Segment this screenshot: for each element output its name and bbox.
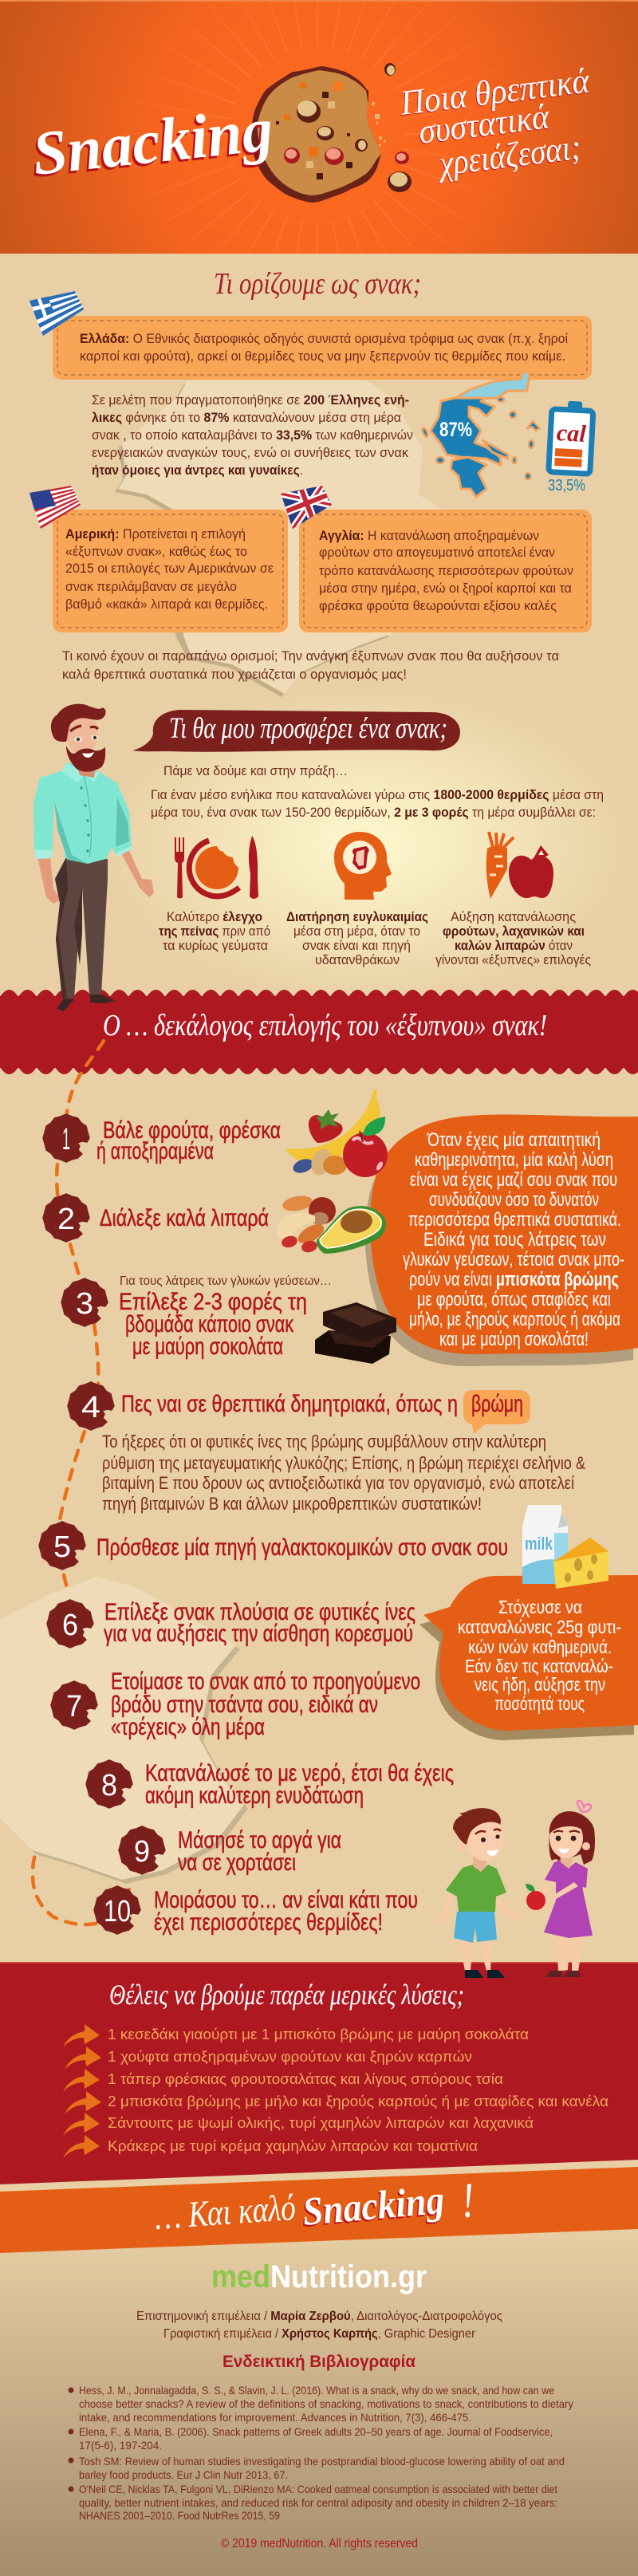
- step 5: Πρόσθεσε μία πηγή γαλακτοκομικών στο σνακ σου: [96, 1534, 508, 1561]
- badge 1: [43, 1114, 89, 1162]
- solution 6: [63, 2135, 478, 2158]
- icon: calorie battery: [548, 400, 593, 494]
- step 3: Για τους λάτρεις των γλυκών γεύσεων…: [120, 1274, 332, 1288]
- text: America definition: «έξυπνων σνακ», καθώς έως το: [65, 544, 247, 559]
- references list: barley food products. Eur J Clin Nutr 2013, 67.: [79, 2468, 288, 2481]
- text: benefit hunger control: τα κυρίως γεύματα: [163, 938, 268, 953]
- orange callout: demanding daily life: [365, 1114, 638, 1366]
- credits: Επιστημονική επιμέλεια / Μαρία Ζερβού, Διαιτολόγος-Διατροφολόγος: [136, 2310, 502, 2323]
- orange closing band: Snacking: [301, 2177, 446, 2234]
- text: benefit hunger control: της πείνας πριν από: [159, 924, 270, 939]
- references list: choose better snacks? A review of the definitions of snacking, motivations to snack, contributions to dietary: [79, 2397, 573, 2410]
- orange closing band: … Και καλό: [153, 2187, 297, 2237]
- badge 9: 9: [134, 1835, 150, 1869]
- step 1: Βάλε φρούτα, φρέσκα: [103, 1117, 281, 1144]
- text: Greek study: Σε μελέτη που πραγματοποιήθηκε σε 200 Έλληνες ενή-: [92, 392, 409, 408]
- text: America definition: βαθμό «κακά» λιπαρά και θερμίδες.: [65, 597, 268, 612]
- text: benefit hunger control: Καλύτερο έλεγχο: [167, 909, 262, 924]
- text: common ground: καλά θρεπτικά συστατικά που χρειάζεται ο οργανισμός μας!: [62, 667, 407, 682]
- dashed route line: [33, 1041, 134, 1924]
- references list: intake, and recommendations for improvement. Advances in Nutrition, 7(3), 466-475.: [79, 2411, 471, 2424]
- icon: nuts and avocado: [277, 1194, 386, 1254]
- subtitle: Ποια θρεπτικά: [397, 61, 592, 123]
- text: America definition: σνακ περιλάμβαναν σε μεγάλο: [65, 579, 237, 594]
- badge 5: 5: [53, 1530, 71, 1564]
- solution 3: 1 τάπερ φρέσκιας φρουτοσαλάτας και λίγους σπόρους τσία: [108, 2071, 503, 2087]
- text: benefit blood sugar: Διατήρηση ευγλυκαιμίας: [286, 909, 428, 924]
- text: Greece definition: Ελλάδα: Ο Εθνικός διατροφικός οδηγός συνιστά ορισμένα τρόφιμα ως σνακ (π.χ. ξηροί: [80, 331, 568, 346]
- title: Snacking: Snacking: [30, 94, 276, 188]
- oat bubble: βρώμη: [471, 1391, 523, 1417]
- step 10: έχει περισσότερες θερμίδες!: [154, 1909, 383, 1936]
- text: oat facts: Το ήξερες ότι οι φυτικές ίνες της βρώμης συμβάλλουν στην καλύτερη: [102, 1432, 546, 1451]
- badge 7: [51, 1681, 97, 1729]
- orange callout: demanding daily life: και με μαύρη σοκολάτα!: [439, 1329, 589, 1350]
- references list: Hess, J. M., Jonnalagadda, S. S., & Slavin, J. L. (2016). What is a snack, why do we snack, and how can we: [79, 2384, 554, 2397]
- boy character: [439, 1808, 522, 1978]
- credits: Γραφιστική επιμέλεια / Χρήστος Καρπής, Graphic Designer: [163, 2327, 476, 2341]
- badge 3: [61, 1278, 108, 1326]
- icon: head with toast: [334, 832, 392, 900]
- text: intro to benefits: μέρα του, ένα σνακ των 150-200 θερμίδων, 2 με 3 φορές τη μέρα συμβάλλει σε:: [151, 805, 596, 820]
- icon: calorie battery: 33,5%: [548, 477, 585, 494]
- banner: decalogue: [0, 987, 638, 1077]
- step 1: ή αποξηραμένα: [96, 1138, 214, 1164]
- panel: solutions: [0, 1962, 638, 2193]
- step 6: [47, 1599, 415, 1648]
- text: benefit hunger control: [159, 909, 270, 953]
- orange callout: fibre target: Στόχευσε να: [498, 1597, 582, 1617]
- orange callout: fibre target: ποσότητά τους: [494, 1693, 585, 1714]
- badge 10: 10: [104, 1895, 131, 1928]
- text: Greece definition: καρποί και φρούτα), αρκεί οι θερμίδες τους να μην ξεπερνούν τις θερμίδες που καίμε.: [80, 349, 565, 364]
- icon: bitten cookie: [250, 63, 412, 203]
- text: England definition: [319, 528, 573, 613]
- badge 3: 3: [76, 1287, 93, 1321]
- icon: Greek flag: [30, 291, 84, 336]
- panel: England: [299, 510, 592, 632]
- badge 4: 4: [81, 1391, 100, 1424]
- icon: US flag: [30, 486, 81, 529]
- references list: Tosh SM: Review of human studies investigating the postprandial blood-glucose lowering ability of oat and: [79, 2455, 565, 2468]
- icon: carrot and apple: [486, 832, 553, 899]
- text: common ground: Τι κοινό έχουν οι παραπάνω ορισμοί; Την ανάγκη έξυπνων σνακ που θα αυξήσουν τα: [62, 648, 559, 664]
- orange closing band: !: [459, 2173, 476, 2228]
- step 9: να σε χορτάσει: [178, 1849, 296, 1876]
- heading: what is a snack: Τι ορίζουμε ως σνακ;: [214, 267, 421, 301]
- text: England definition: Αγγλία: Η κατανάλωση αποξηραμένων: [319, 528, 539, 543]
- credits: [136, 2310, 502, 2341]
- text: America definition: Αμερική: Προτείνεται η επιλογή: [65, 526, 246, 542]
- badge 2: 2: [57, 1203, 75, 1236]
- icon: plate with fork and knife: [175, 836, 258, 899]
- references list: [69, 2384, 573, 2522]
- solution 3: [63, 2069, 503, 2092]
- badge 1: 1: [62, 1123, 70, 1156]
- text: benefit blood sugar: σνακ είναι και πηγή: [302, 938, 411, 953]
- step 2: Διάλεξε καλά λιπαρά: [100, 1205, 269, 1231]
- text: intro to benefits: [151, 763, 604, 820]
- text: Greece definition: [80, 331, 568, 364]
- subtitle: συστατικά: [416, 97, 552, 152]
- references list: quality, better nutrient intakes, and reduced risk for central adiposity and obesity in children 2–18 years:: [79, 2496, 557, 2509]
- header panel: [0, 0, 638, 254]
- copyright: © 2019 medNutrition. All rights reserved: [221, 2537, 418, 2550]
- solution 5: [63, 2113, 534, 2136]
- background footer: [0, 2225, 638, 2576]
- girl character: [526, 1801, 595, 1977]
- badge 10: [94, 1886, 140, 1934]
- icon: calorie battery: cal: [556, 419, 587, 447]
- background glow: benefits section: [0, 678, 638, 997]
- references list: NHANES 2001–2010. Food NutrRes 2015, 59: [79, 2509, 280, 2522]
- badge 6: 6: [62, 1609, 78, 1642]
- text: England definition: φρέσκα φρούτα θεωρούνται εξίσου καλές: [319, 598, 557, 613]
- step 3: με μαύρη σοκολάτα: [132, 1333, 283, 1360]
- step 1: [43, 1114, 281, 1164]
- icon: map of Greece 87%: 87%: [439, 419, 472, 441]
- solution 4: [65, 2091, 608, 2114]
- icon: UK flag: [281, 486, 332, 529]
- step 4: [68, 1382, 530, 1434]
- text: benefit food intake: γίνονται «έξυπνες» επιλογές: [435, 952, 591, 967]
- step 7: «τρέχεις» όλη μέρα: [111, 1714, 265, 1740]
- text: benefit blood sugar: υδατανθράκων: [315, 952, 400, 967]
- subtitle: χρειάζεσαι;: [435, 128, 583, 183]
- step 7: Ετοίμασε το σνακ από το προηγούμενο: [111, 1668, 420, 1695]
- text: oat facts: [102, 1432, 585, 1514]
- step 5: [39, 1522, 508, 1570]
- badge 8: [86, 1760, 132, 1808]
- orange callout: demanding daily life: Όταν έχεις μία απαιτητική: [427, 1129, 601, 1151]
- icon: milk and cheese: milk: [525, 1534, 553, 1554]
- speech bubble heading: [132, 710, 460, 752]
- orange closing band: [0, 2167, 638, 2253]
- panel: America: [53, 510, 288, 632]
- text: Greek study: ήταν όμοιες για άντρες και γυναίκες.: [92, 463, 303, 478]
- step 4: Πες ναι σε θρεπτικά δημητριακά, όπως η: [121, 1391, 458, 1417]
- heading: references: Ενδεικτική Βιβλιογραφία: [223, 2353, 415, 2371]
- solution 1: [63, 2024, 529, 2047]
- text: Greek study: [92, 392, 413, 478]
- badge 5: [39, 1522, 85, 1570]
- badge 7: 7: [66, 1690, 82, 1723]
- beige diagonal strip: [0, 2160, 638, 2193]
- step 7: [51, 1668, 420, 1740]
- step 9: [119, 1826, 341, 1876]
- badge 4: [68, 1382, 114, 1430]
- solution 5: Σάντουιτς με ψωμί ολικής, τυρί χαμηλών λιπαρών και λαχανικά: [108, 2115, 534, 2131]
- text: America definition: [65, 526, 274, 612]
- text: common ground: [62, 648, 559, 682]
- references list: Elena, F., & Maria, B. (2006). Snack patterns of Greek adults 20–50 years of age. Journal of Foodservice,: [79, 2425, 553, 2438]
- icon: map of Greece 87%: [421, 371, 540, 497]
- text: Greek study: ενεργειακών αναγκών τους, ενώ οι συνήθειες των σνακ: [92, 445, 408, 460]
- text: oat facts: πηγή βιταμινών Β και άλλων μικροθρεπτικών συστατικών!: [102, 1494, 482, 1514]
- page background: [0, 254, 638, 1968]
- text: intro to benefits: Πάμε να δούμε και στην πράξη…: [163, 763, 348, 778]
- icon: fruits: [286, 1089, 388, 1178]
- icon: milk and cheese: [522, 1505, 608, 1589]
- step 8: [86, 1760, 454, 1809]
- text: England definition: φρούτων στο απογευματινό αποτελεί έναν: [319, 545, 555, 560]
- text: benefit food intake: Αύξηση κατανάλωσης: [451, 909, 576, 924]
- icon: dark chocolate: [315, 1302, 396, 1364]
- badge 6: [47, 1600, 93, 1648]
- subtitle: [397, 61, 592, 183]
- step 2: [43, 1194, 269, 1242]
- background map shape: lower left: [0, 1577, 248, 1884]
- references list: 17(5-6), 197-204.: [79, 2439, 162, 2452]
- logo: medNutrition.gr: medNutrition.gr: [211, 2259, 427, 2294]
- step 3: [61, 1274, 332, 1360]
- solution 4: 2 μπισκότα βρώμης με μήλο και ξηρούς καρπούς ή με σταφίδες και κανέλα: [108, 2093, 608, 2109]
- solution 2: 1 χούφτα αποξηραμένων φρούτων και ξηρών καρπών: [108, 2049, 472, 2065]
- text: England definition: μέσα στην ημέρα, ενώ οι ξηροί καρποί και τα: [319, 581, 572, 596]
- background map shape: definitions: [115, 380, 443, 697]
- text: benefit food intake: καλών λιπαρών όταν: [455, 938, 573, 953]
- text: intro to benefits: Για έναν μέσο ενήλικα που καταναλώνει γύρω στις 1800-2000 θερμίδες μέσα στη: [151, 787, 604, 802]
- step 10: Μοιράσου το… αν είναι κάτι που: [154, 1887, 418, 1913]
- panel: Greece: [53, 316, 592, 380]
- step 7: βράδυ στην τσάντα σου, ειδικά αν: [111, 1692, 378, 1718]
- step 8: Κατανάλωσέ το με νερό, έτσι θα έχεις: [145, 1760, 454, 1786]
- text: benefit blood sugar: μέσα στη μέρα, όταν το: [293, 924, 420, 939]
- step 10: [94, 1886, 418, 1936]
- orange callout: fibre target: [419, 1575, 638, 1740]
- step 3: βδομάδα κάποιο σνακ: [125, 1311, 294, 1337]
- text: England definition: τρόπο κατανάλωσης περισσότερων φρούτων: [319, 563, 573, 578]
- references list: O'Neil CE, Nicklas TA, Fulgoni VL, DiRienzo MA: Cooked oatmeal consumption is associated with better diet: [79, 2483, 557, 2495]
- step 3: Επίλεξε 2-3 φορές τη: [119, 1289, 307, 1315]
- solution 6: Κράκερς με τυρί κρέμα χαμηλών λιπαρών και τοματίνια: [108, 2138, 478, 2154]
- text: America definition: 2015 οι επιλογές των Αμερικάνων σε: [65, 561, 274, 576]
- text: benefit food intake: [435, 909, 591, 967]
- text: benefit blood sugar: [286, 909, 428, 967]
- badge 8: 8: [101, 1769, 117, 1802]
- badge 2: [43, 1194, 89, 1242]
- heading: solutions: Θέλεις να βρούμε παρέα μερικές λύσεις;: [109, 1979, 464, 2011]
- step 9: Μάσησέ το αργά για: [178, 1827, 341, 1853]
- solution 1: 1 κεσεδάκι γιαούρτι με 1 μπισκότο βρώμης με μαύρη σοκολάτα: [108, 2027, 529, 2042]
- step 8: ακόμη καλύτερη ενυδάτωση: [145, 1782, 364, 1809]
- solution 2: [65, 2046, 472, 2070]
- badge 9: [119, 1826, 165, 1874]
- step 6: για να αυξήσεις την αίσθηση κορεσμού: [104, 1621, 413, 1647]
- text: benefit food intake: φρούτων, λαχανικών και: [443, 924, 585, 939]
- orange callout: fibre target: νεις ήδη, αύξησε την: [475, 1674, 605, 1695]
- step 6: Επίλεξε σνακ πλούσια σε φυτικές ίνες: [104, 1599, 415, 1625]
- icon: red apple: [526, 1884, 545, 1910]
- speech bubble heading: Τι θα μου προσφέρει ένα σνακ;: [169, 712, 447, 745]
- text: Greek study: λικες φάνηκε ότι το 87% καταναλώνουν μέσα στη μέρα: [92, 410, 401, 425]
- text: Greek study: σνακ , το οποίο καταλαμβάνει το 33,5% των καθημερινών: [92, 427, 413, 443]
- man character: [33, 704, 154, 1011]
- oat bubble: [463, 1390, 530, 1434]
